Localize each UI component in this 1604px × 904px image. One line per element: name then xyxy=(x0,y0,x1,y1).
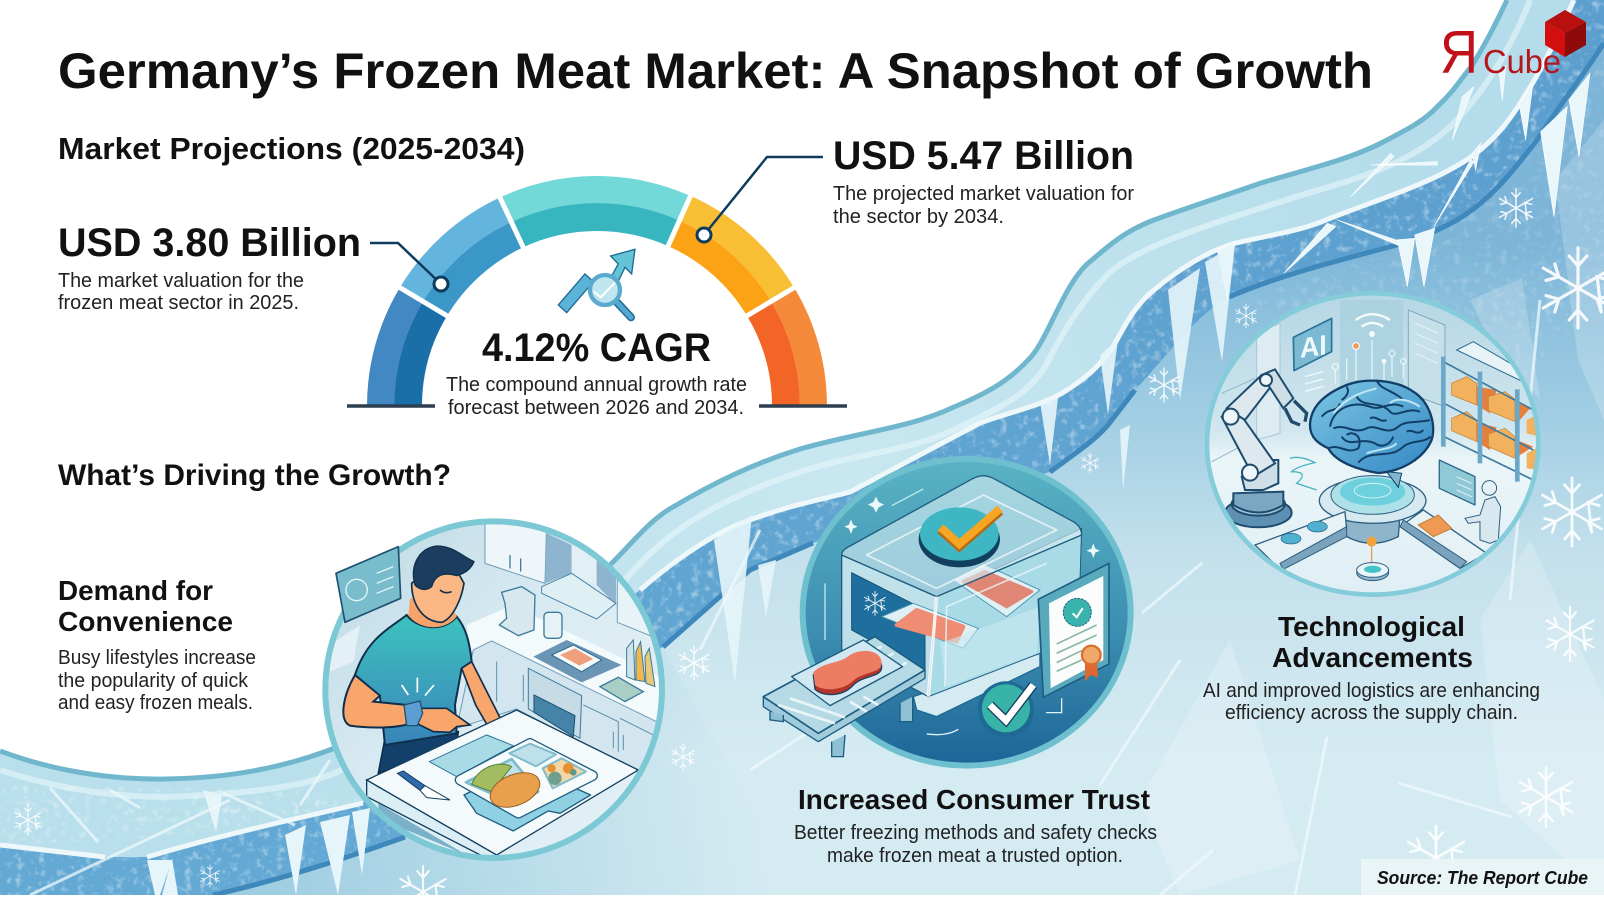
pants xyxy=(378,732,458,773)
logo: RCube: Я xyxy=(1440,19,1478,86)
circle ring xyxy=(325,521,662,858)
packaged meat inside xyxy=(953,564,1040,617)
driver: demand for convenience text: the popularity of quick xyxy=(58,670,249,692)
logo: RCube: Cube xyxy=(1483,43,1561,80)
illustration: AI brain, robot arm and warehouse xyxy=(1207,293,1540,595)
AI sign xyxy=(1293,318,1332,371)
driver: technological advancements text: Technological xyxy=(1278,611,1465,642)
tray with steak xyxy=(792,640,903,706)
callout: 2025 value: The market valuation for the xyxy=(58,270,304,292)
driver: technological advancements text xyxy=(1203,611,1540,724)
callout: 2034 value xyxy=(697,134,1134,242)
callout: 2034 value: the sector by 2034. xyxy=(833,206,1004,228)
driver: increased consumer trust text: make frozen meat a trusted option. xyxy=(827,845,1123,867)
freezer snowflake xyxy=(865,591,885,615)
sensor puck xyxy=(1357,537,1389,581)
shirt xyxy=(355,615,472,745)
ice cracks xyxy=(30,300,1540,895)
snowflakes xyxy=(1499,189,1533,227)
conveyors xyxy=(1255,512,1347,569)
source note xyxy=(1361,859,1604,895)
driver: increased consumer trust text xyxy=(794,784,1157,867)
driver: increased consumer trust text: Increased Consumer Trust xyxy=(798,784,1150,815)
driver: demand for convenience text: Busy lifestyles increase xyxy=(58,647,256,669)
cabinets xyxy=(485,523,547,583)
far arm xyxy=(460,662,500,724)
shelving with boxes xyxy=(1443,342,1540,482)
conveyor xyxy=(763,670,925,742)
neck and head xyxy=(408,598,457,627)
icicles lower left xyxy=(147,790,370,895)
table xyxy=(367,780,497,860)
callout: 2025 value: USD 3.80 Billion xyxy=(58,221,361,265)
machine left face xyxy=(842,555,937,697)
tablet on wall xyxy=(336,547,401,622)
back wall panels xyxy=(1257,323,1280,440)
brain xyxy=(1310,380,1433,487)
platform xyxy=(1319,476,1426,543)
logo cube xyxy=(1545,10,1586,57)
illustration: glass freezing machine with checks xyxy=(763,459,1131,766)
machine right face xyxy=(928,528,1082,697)
mat and tray xyxy=(533,640,622,682)
machine top face xyxy=(842,476,1082,597)
cagr text: The compound annual growth rate xyxy=(446,374,747,396)
driver: demand for convenience text: and easy frozen meals. xyxy=(58,692,253,714)
illustration: man preparing frozen meal in kitchen xyxy=(325,521,663,860)
callout: 2034 value: The projected market valuation for xyxy=(833,183,1134,205)
coffee machine xyxy=(499,587,535,636)
AI sign: AI xyxy=(1300,329,1327,364)
driver: demand for convenience text xyxy=(58,575,256,714)
logo: RCube xyxy=(1440,10,1586,86)
cagr text: 4.12% CAGR xyxy=(482,326,711,370)
robot arm xyxy=(1222,369,1307,527)
driver: technological advancements text: Advancements xyxy=(1272,642,1473,673)
title: Germany’s Frozen Meat Market: A Snapshot of Growth xyxy=(58,43,1373,99)
operator and screen xyxy=(1439,460,1501,543)
driver: technological advancements text: AI and improved logistics are enhancing xyxy=(1203,680,1540,702)
green check badge xyxy=(978,681,1034,737)
callout: 2025 value: frozen meat sector in 2025. xyxy=(58,292,299,314)
bottles xyxy=(627,640,635,680)
machine base xyxy=(913,653,1040,717)
knife xyxy=(397,771,425,790)
icicles upper right xyxy=(1217,67,1590,300)
source note: Source: The Report Cube xyxy=(1377,868,1588,888)
wifi and circuit lines xyxy=(1356,314,1390,327)
floor lines xyxy=(1212,378,1255,462)
heading: drivers: What’s Driving the Growth? xyxy=(58,459,451,492)
cutting board xyxy=(429,735,513,777)
icicles centre xyxy=(714,245,1235,683)
heading: market projections: Market Projections (2025-2034) xyxy=(58,131,525,166)
driver: demand for convenience text: Convenience xyxy=(58,606,233,637)
watch xyxy=(404,701,423,726)
cagr text xyxy=(446,326,747,419)
counter xyxy=(467,608,663,725)
wall shadow xyxy=(330,625,360,672)
callout: 2025 value xyxy=(58,221,448,314)
bottom white strip xyxy=(0,895,1604,904)
near arm xyxy=(343,675,410,728)
gauge chart xyxy=(347,176,847,406)
driver: demand for convenience text: Demand for xyxy=(58,575,213,606)
panel: market projections xyxy=(58,131,1134,419)
meal tray xyxy=(463,788,592,832)
callout: 2034 value: USD 5.47 Billion xyxy=(833,134,1134,178)
certificate xyxy=(1038,563,1109,697)
pale ice peaks xyxy=(1140,120,1604,895)
cagr text: forecast between 2026 and 2034. xyxy=(448,397,744,419)
driver: increased consumer trust text: Better freezing methods and safety checks xyxy=(794,822,1157,844)
driver: technological advancements text: efficiency across the supply chain. xyxy=(1225,702,1518,724)
hair xyxy=(413,546,474,589)
sparkles xyxy=(844,497,1100,558)
circle ring xyxy=(1207,293,1538,595)
jar xyxy=(544,612,562,638)
check badge xyxy=(919,511,1000,567)
icon: growth arrow and magnifier xyxy=(558,249,635,317)
